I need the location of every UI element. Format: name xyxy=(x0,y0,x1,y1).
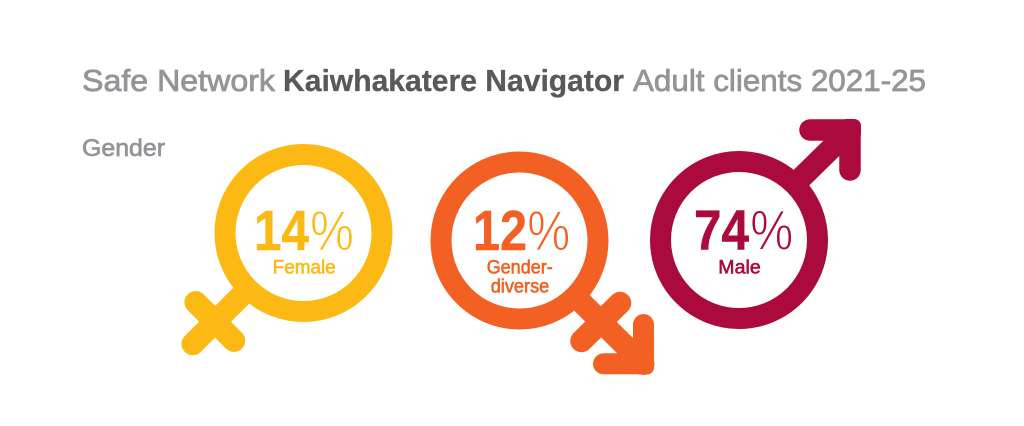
title: Kaiwhakatere Navigator xyxy=(283,63,624,98)
value: 14% xyxy=(254,199,354,263)
title: Adult clients 2021-25 xyxy=(633,63,926,98)
value: 12%: % xyxy=(527,199,570,263)
panel: gender-diverse xyxy=(441,162,654,374)
icon: female symbol xyxy=(193,154,382,344)
value: 12%: 12 xyxy=(473,199,527,263)
value: 14%: 14 xyxy=(254,199,309,263)
label: Male: Male xyxy=(718,257,761,278)
panel: male xyxy=(660,119,861,318)
value: 74% xyxy=(694,198,793,262)
label: Gender-diverse: diverse xyxy=(491,277,549,298)
subheading: Gender: Gender xyxy=(82,135,165,162)
panel: female xyxy=(193,154,382,344)
value: 74%: % xyxy=(750,198,793,262)
label: Gender-diverse xyxy=(487,257,553,298)
arrow corner xyxy=(633,354,654,374)
icon: gender-diverse symbol xyxy=(441,162,644,364)
label: Gender-diverse: Gender- xyxy=(487,257,553,278)
label: Female: Female xyxy=(273,257,336,278)
value: 14%: % xyxy=(310,199,354,263)
arrow corner xyxy=(840,119,861,140)
title xyxy=(82,63,926,98)
value: 12% xyxy=(473,199,570,263)
icon: male symbol xyxy=(660,130,850,318)
value: 74%: 74 xyxy=(694,198,749,262)
title: Safe Network xyxy=(82,63,276,98)
